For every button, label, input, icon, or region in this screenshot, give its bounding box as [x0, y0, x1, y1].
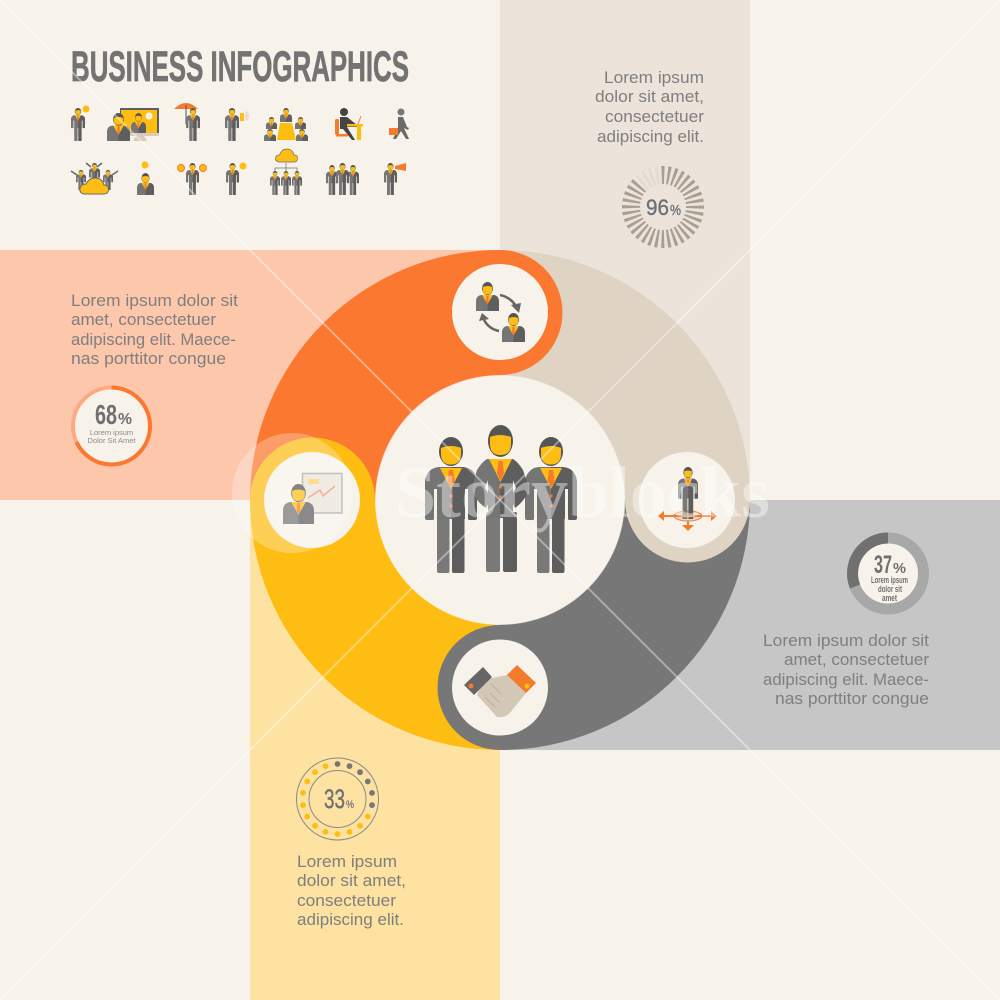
gauge: 96 percent: 96 [646, 195, 669, 220]
bulb: orange [438, 250, 562, 375]
gauge: 68 percent [73, 388, 150, 464]
gauge: 68 percent: 68 [95, 399, 117, 430]
icon row 2 [71, 149, 406, 195]
icon: person at desk [335, 108, 363, 140]
gauge: 96 percent [630, 160, 696, 240]
gauge: 96 percent: % [670, 202, 681, 219]
icon circle: left chart board [264, 452, 360, 548]
panel: beige text: consectetuer [605, 107, 704, 126]
gauge: 37 percent: amet [882, 593, 897, 603]
gauge: 37 percent: dolor sit [878, 584, 902, 594]
icon: cloud hierarchy [270, 149, 302, 195]
panel: grey text: nas porttitor congue [775, 689, 929, 708]
panel: yellow text: consectetuer [297, 891, 396, 910]
gauge: 33 percent: 33 [324, 784, 345, 814]
segment: beige [500, 250, 750, 500]
segment: yellow [250, 500, 500, 750]
icon: person with idea bulb [137, 162, 154, 195]
panel: beige text: adipiscing elit. [597, 127, 704, 146]
icon: person with bulb [226, 162, 246, 195]
bulb: yellow [250, 438, 375, 562]
panel: yellow text: dolor sit amet, [297, 871, 406, 890]
icon: walking person [389, 108, 409, 139]
icon circle: top exchange [452, 264, 548, 360]
panel: grey text: adipiscing elit. Maece- [763, 670, 929, 689]
chart: swirl ring [250, 250, 750, 750]
gauge: 68 percent: % [118, 411, 132, 428]
icon: team of three [326, 163, 359, 195]
icon circle: right direction [639, 452, 735, 548]
panel: yellow text: adipiscing elit. [297, 910, 404, 929]
icon: meeting table [264, 108, 308, 141]
panel: orange text [71, 291, 238, 368]
icon: video presentation [107, 108, 159, 141]
gauge: 33 percent [296, 758, 378, 840]
panel: grey text: amet, consectetuer [784, 650, 929, 669]
gauge: 37 percent: 37 [874, 551, 892, 579]
icon: person with coins [178, 163, 206, 195]
band: orange panel [0, 250, 500, 500]
icon circle: bottom handshake [452, 640, 548, 736]
icon row 1 [71, 103, 409, 141]
bulb: beige [625, 438, 750, 562]
icon: person with umbrella [174, 103, 200, 141]
panel: beige text [595, 68, 704, 146]
gauge: 37 percent: Lorem ipsum [871, 575, 908, 585]
segment: orange [250, 250, 500, 500]
panel: yellow text: Lorem ipsum [297, 852, 397, 871]
gauge: 37 percent: % [893, 560, 906, 577]
icon: central business team [425, 425, 577, 573]
icon: person with megaphone [384, 163, 406, 195]
band: grey panel [500, 500, 1000, 750]
panel: orange text: Lorem ipsum dolor sit [71, 291, 238, 310]
icon: cloud with cheering people [71, 163, 118, 194]
panel: grey text [763, 631, 929, 708]
title: BUSINESS INFOGRAPHICS [71, 43, 409, 91]
panel: orange text: adipiscing elit. Maece- [71, 330, 236, 349]
panel: beige text: dolor sit amet, [595, 87, 704, 106]
bulb: grey [438, 625, 562, 750]
icon: person with speech bubble [71, 106, 90, 141]
center disc [376, 376, 624, 624]
gauge: 68 percent: Dolor Sit Amet [88, 436, 136, 445]
panel: orange text: nas porttitor congue [71, 349, 226, 368]
gauge: 37 percent [852, 538, 924, 609]
watermark: Storyblocks [395, 452, 770, 533]
gauge: 68 percent: Lorem ipsum [90, 428, 133, 437]
panel: yellow text [297, 852, 406, 929]
band: beige panel [500, 0, 750, 500]
band: yellow panel [250, 500, 500, 1000]
gauge: 33 percent: % [346, 799, 354, 811]
panel: orange text: amet, consectetuer [71, 310, 216, 329]
segment: grey [500, 500, 750, 750]
panel: beige text: Lorem ipsum [604, 68, 704, 87]
panel: grey text: Lorem ipsum dolor sit [763, 631, 929, 650]
icon: person with phone [225, 108, 249, 141]
